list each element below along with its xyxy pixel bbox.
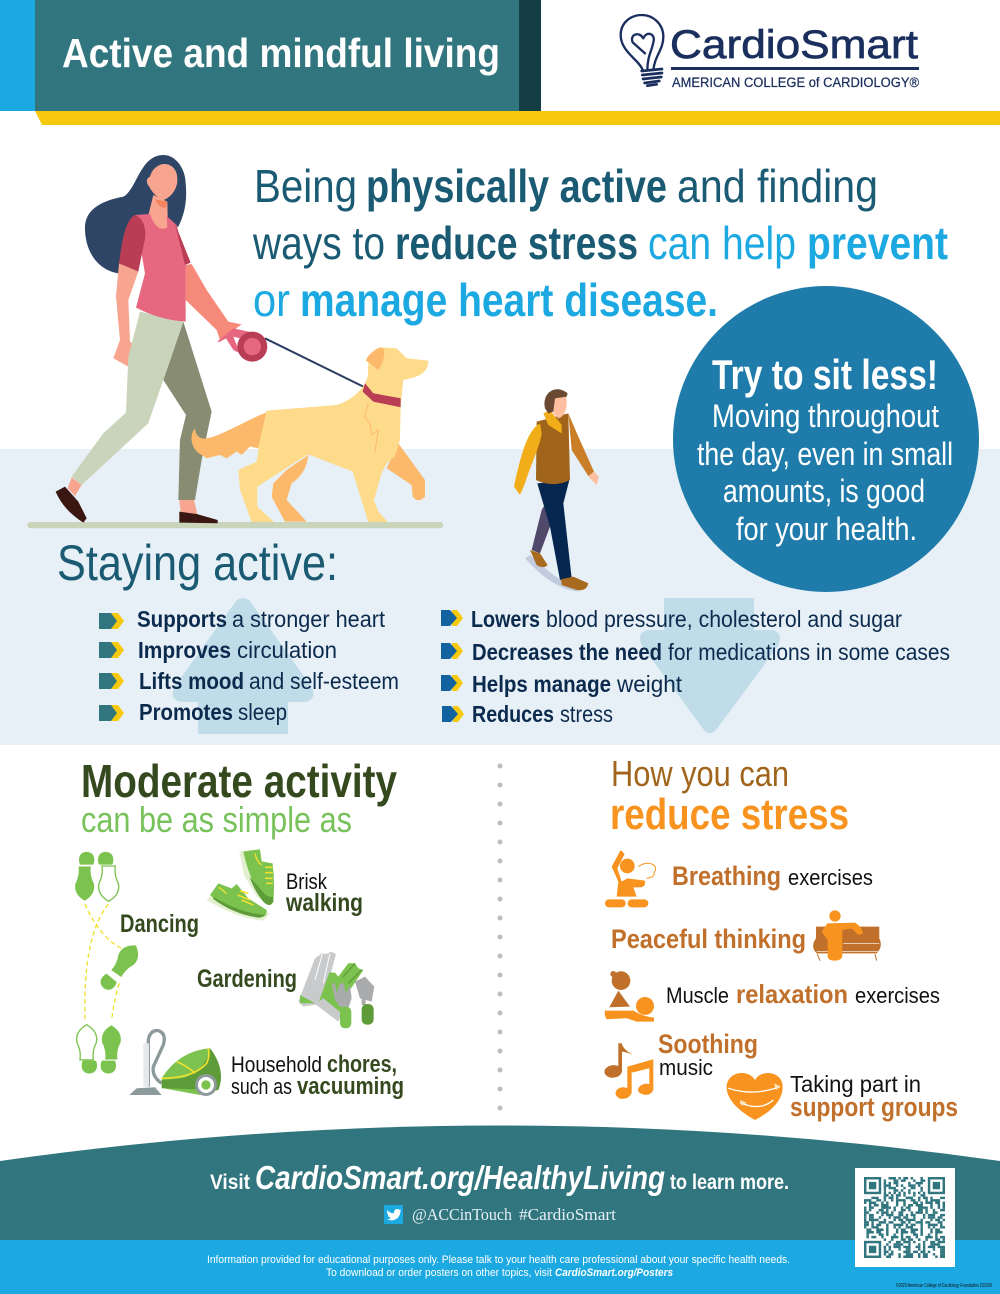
icon: sneakers bbox=[207, 849, 274, 921]
disclaimer bbox=[207, 1254, 790, 1279]
labels: stress reducers: Soothing bbox=[658, 1029, 758, 1059]
list: benefits left: a stronger heart bbox=[232, 606, 385, 632]
icon: breathing exercises bbox=[605, 850, 656, 907]
list: benefits right: Decreases the need bbox=[472, 639, 662, 665]
headline bbox=[252, 160, 948, 326]
headline: manage heart disease. bbox=[300, 274, 718, 326]
header band bbox=[0, 0, 1000, 125]
woman bbox=[56, 155, 242, 523]
headline: ways to bbox=[252, 217, 385, 269]
labels: moderate activities: Brisk bbox=[286, 869, 328, 894]
list: benefits right: for medications in some cases bbox=[668, 639, 950, 665]
icon: dance footprints bbox=[75, 852, 144, 1073]
disclaimer: CardioSmart.org/Posters bbox=[555, 1267, 673, 1279]
labels: stress reducers: support groups bbox=[790, 1092, 958, 1122]
footer: blue band bbox=[0, 1240, 1000, 1294]
heading: moderate activity: Moderate activity bbox=[81, 755, 397, 807]
labels: stress reducers: music bbox=[659, 1055, 713, 1080]
list: benefits right: stress bbox=[560, 701, 613, 727]
list: benefits right bbox=[441, 606, 950, 727]
labels: stress reducers: exercises bbox=[788, 865, 873, 890]
call to action: CardioSmart.org/HealthyLiving bbox=[255, 1159, 665, 1196]
callout: try to sit less: amounts, is good bbox=[723, 473, 925, 509]
callout: try to sit less: Try to sit less! bbox=[712, 351, 938, 398]
wordmark: CardioSmart bbox=[670, 23, 918, 67]
list: benefits left bbox=[99, 606, 399, 725]
footer: teal dome bbox=[0, 1126, 1000, 1240]
headline: reduce stress bbox=[395, 217, 638, 269]
headline: and finding bbox=[677, 160, 878, 212]
labels: moderate activities: Dancing bbox=[120, 910, 199, 938]
QR code bbox=[855, 1168, 955, 1267]
logo: CardioSmart: AMERICAN COLLEGE of CARDIOLOGY® bbox=[672, 75, 919, 90]
background panel: staying active bbox=[0, 449, 1000, 745]
labels: stress reducers: Muscle bbox=[666, 983, 729, 1008]
list: benefits right: blood pressure, cholesterol and sugar bbox=[546, 606, 902, 632]
callout: try to sit less: the day, even in small bbox=[697, 436, 953, 472]
labels: moderate activities: Household bbox=[231, 1052, 322, 1077]
list: benefits left: Improves bbox=[138, 637, 231, 663]
logo: CardioSmart bbox=[621, 15, 919, 90]
labels: stress reducers: Breathing bbox=[672, 861, 781, 891]
callout: try to sit less bbox=[673, 286, 979, 592]
list: benefits right: Lowers bbox=[471, 606, 540, 632]
illustration: man walking bbox=[514, 389, 599, 592]
headline: physically active bbox=[366, 160, 667, 212]
down arrow background bbox=[640, 598, 780, 734]
heading: reduce stress bbox=[610, 753, 849, 839]
headline: Being bbox=[254, 160, 357, 212]
labels: stress reducers: Peaceful thinking bbox=[611, 924, 806, 954]
list: benefits right: Reduces bbox=[472, 701, 554, 727]
ground line bbox=[27, 522, 443, 528]
dotted divider bbox=[498, 766, 502, 1110]
labels: moderate activities: such as bbox=[231, 1074, 292, 1099]
list: benefits left: circulation bbox=[237, 637, 337, 663]
icon: massage relaxation bbox=[605, 971, 654, 1022]
dog bbox=[192, 347, 428, 522]
disclaimer: Information provided for educational purposes only. Please talk to your health care professional about your specific health needs. bbox=[207, 1254, 790, 1266]
headline: or bbox=[253, 274, 290, 326]
headline: can help bbox=[648, 217, 796, 269]
icon: music notes bbox=[604, 1043, 653, 1099]
icon: heart hug bbox=[727, 1073, 783, 1120]
labels: moderate activities: walking bbox=[285, 889, 363, 917]
leash and reel bbox=[217, 328, 363, 387]
labels: moderate activities: vacuuming bbox=[297, 1073, 404, 1100]
headline: prevent bbox=[807, 217, 948, 269]
heading: reduce stress: reduce stress bbox=[610, 790, 849, 839]
icon: vacuum cleaner bbox=[129, 1031, 221, 1096]
labels: stress reducers: relaxation bbox=[736, 979, 848, 1009]
icon: gloves and garden tools bbox=[298, 952, 374, 1028]
list: benefits left: and self-esteem bbox=[249, 668, 399, 694]
labels: stress reducers: Taking part in bbox=[790, 1071, 921, 1097]
labels: moderate activities bbox=[120, 869, 404, 1100]
heading: moderate activity: can be as simple as bbox=[81, 799, 352, 840]
call to action: Visit bbox=[210, 1171, 250, 1194]
list: benefits left: Promotes bbox=[139, 699, 233, 725]
bullet markers left bbox=[99, 613, 124, 721]
icon: person on sofa bbox=[813, 910, 881, 961]
call to action: to learn more. bbox=[670, 1171, 789, 1194]
labels: moderate activities: chores, bbox=[327, 1051, 397, 1078]
illustration: woman walking dog bbox=[27, 155, 443, 528]
heading: moderate activity bbox=[81, 755, 397, 840]
bullet markers right bbox=[441, 610, 464, 722]
title: Active and mindful living bbox=[62, 30, 500, 76]
list: benefits left: Lifts mood bbox=[139, 668, 244, 694]
icon: twitter bbox=[384, 1205, 403, 1224]
social handles: #CardioSmart bbox=[519, 1205, 616, 1224]
list: benefits left: Supports bbox=[137, 606, 227, 632]
labels: stress reducers bbox=[611, 861, 958, 1122]
callout: try to sit less: for your health. bbox=[736, 511, 917, 547]
social handles: @ACCinTouch bbox=[412, 1205, 512, 1224]
up arrow background bbox=[173, 598, 313, 734]
list: benefits left: sleep bbox=[238, 699, 287, 725]
disclaimer: To download or order posters on other topics, visit bbox=[326, 1267, 552, 1279]
icon: light bulb with heart bbox=[621, 15, 663, 86]
list: benefits right: Helps manage bbox=[472, 671, 611, 697]
labels: moderate activities: Gardening bbox=[197, 965, 297, 993]
heading: reduce stress: How you can bbox=[611, 753, 789, 794]
labels: stress reducers: exercises bbox=[855, 983, 940, 1008]
social handles bbox=[384, 1205, 616, 1224]
list: benefits right: weight bbox=[616, 671, 682, 697]
callout: try to sit less: Moving throughout bbox=[712, 398, 939, 434]
heading: staying active: Staying active: bbox=[57, 535, 338, 591]
